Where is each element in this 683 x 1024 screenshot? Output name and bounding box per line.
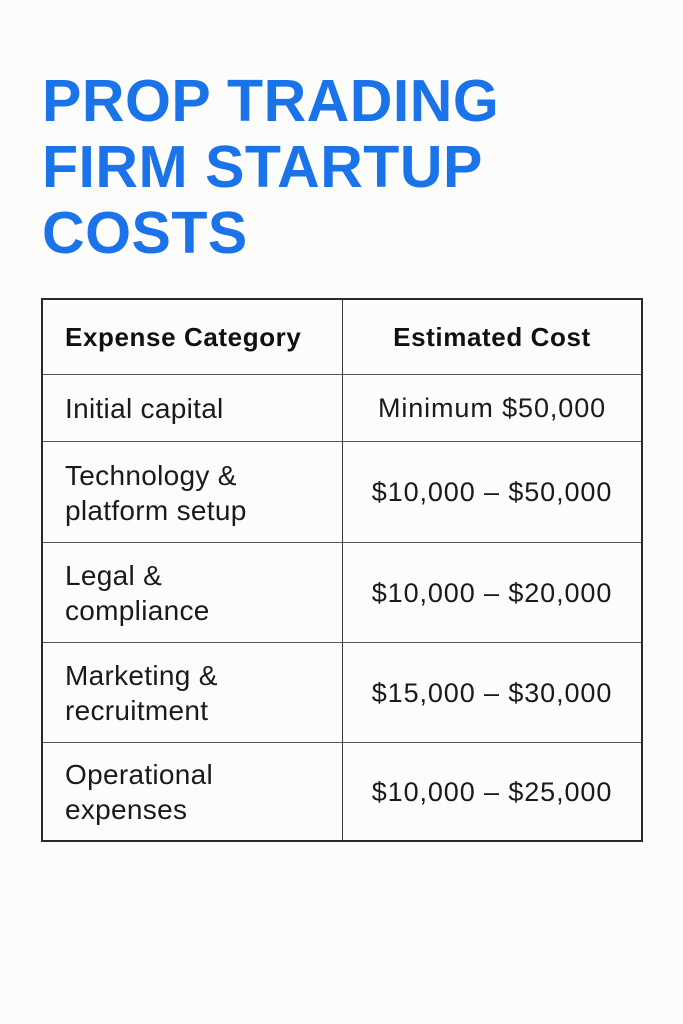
row: technology: $10,000 – $50,000 bbox=[372, 477, 612, 507]
row: marketing: recruitment bbox=[65, 695, 208, 726]
row: legal: Legal & bbox=[65, 560, 162, 591]
table: startup costs bbox=[41, 298, 643, 842]
row: technology bbox=[43, 441, 641, 543]
header row: Expense Category bbox=[65, 322, 301, 352]
row: legal bbox=[43, 542, 641, 643]
title: COSTS bbox=[42, 200, 248, 266]
row: marketing bbox=[43, 642, 641, 743]
row: operational: Operational bbox=[65, 759, 213, 790]
row: initial capital bbox=[43, 374, 641, 442]
header row: Estimated Cost bbox=[393, 322, 591, 352]
row: initial capital: Initial capital bbox=[65, 393, 224, 424]
row: operational bbox=[43, 742, 641, 841]
row: marketing: Marketing & bbox=[65, 660, 218, 691]
row: technology: platform setup bbox=[65, 494, 247, 526]
row: technology: Technology & bbox=[65, 460, 237, 490]
header row bbox=[65, 322, 591, 352]
row: operational: $10,000 – $25,000 bbox=[372, 776, 612, 806]
title: PROP TRADING bbox=[42, 68, 499, 134]
title: FIRM STARTUP bbox=[42, 134, 483, 200]
row: legal: $10,000 – $20,000 bbox=[372, 578, 612, 608]
row: operational: expenses bbox=[65, 794, 187, 825]
row: marketing: $15,000 – $30,000 bbox=[372, 678, 612, 708]
row: initial capital: Minimum $50,000 bbox=[378, 393, 606, 423]
title bbox=[42, 68, 499, 266]
row: legal: compliance bbox=[65, 595, 210, 626]
